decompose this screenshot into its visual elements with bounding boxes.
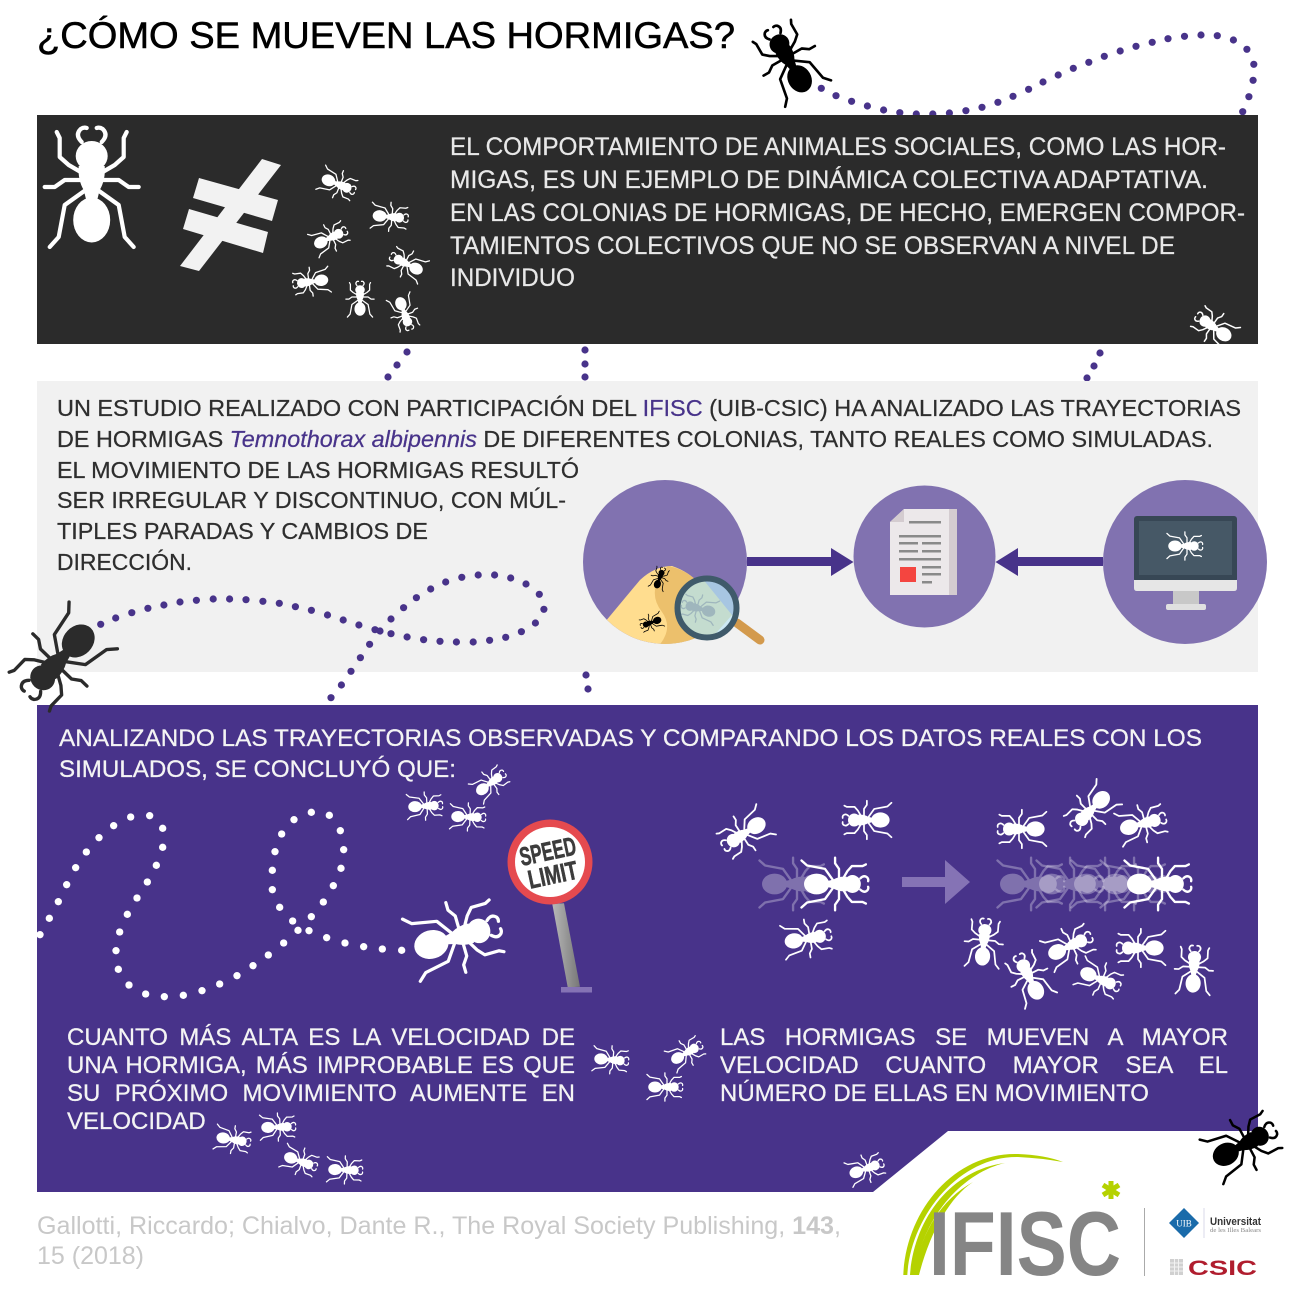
icon: ants with short displacement (712, 801, 891, 962)
icon: four small ants bottom (213, 1112, 363, 1185)
study text: TIPLES PARADAS Y CAMBIOS DE (57, 518, 428, 544)
arrow: to more ants (902, 860, 970, 904)
icon: many ants with long displacement (962, 777, 1214, 1010)
study text: EL MOVIMIENTO DE LAS HORMIGAS RESULTÓ (57, 457, 579, 483)
icon: ant peeking at panel edge (1190, 305, 1242, 344)
conclusions heading: SIMULADOS, SE CONCLUYÓ QUE: (59, 756, 456, 783)
logo: CSIC (1170, 1257, 1257, 1280)
icon: speed limit sign: SPEED (517, 831, 579, 872)
logo: IFISC: IFISC (929, 1194, 1121, 1295)
intro text: EN LAS COLONIAS DE HORMIGAS, DE HECHO, EMERGEN COMPOR- (450, 200, 1245, 227)
text block: left conclusion (67, 1024, 575, 1135)
intro text: TAMIENTOS COLECTIVOS QUE NO SE OBSERVAN A NIVEL DE (450, 233, 1175, 260)
arrow: to document (747, 548, 854, 576)
icon: three small ants between texts (592, 1032, 709, 1101)
conclusions heading (59, 725, 1202, 783)
icon: black ant top (745, 14, 834, 108)
dotted trail: top (818, 31, 1257, 118)
dotted trail: middle loop (97, 571, 592, 701)
title: ¿CÓMO SE MUEVEN LAS HORMIGAS? (37, 15, 735, 56)
icon: speed limit sign (508, 820, 592, 992)
text block: right conclusion (720, 1024, 1228, 1107)
text block: left conclusion: UNA HORMIGA, MÁS IMPROBABLE ES QUE (67, 1052, 575, 1079)
logo: IFISC (903, 1154, 1121, 1295)
panel: conclusions (36, 705, 1258, 1192)
panel: dark intro (37, 115, 1258, 354)
intro text (450, 134, 1245, 292)
intro text: MIGAS, ES UN EJEMPLO DE DINÁMICA COLECTIVA ADAPTATIVA. (450, 167, 1208, 194)
study text: DIRECCIÓN. (57, 549, 192, 575)
dotted trail: white (36, 809, 405, 1000)
intro text: EL COMPORTAMIENTO DE ANIMALES SOCIALES, COMO LAS HOR- (450, 134, 1226, 161)
study text: DE HORMIGAS Temnothorax albipennis DE DIFERENTES COLONIAS, TANTO REALES COMO SIMULADAS. (57, 426, 1213, 452)
text block: left conclusion: CUANTO MÁS ALTA ES LA VELOCIDAD DE (67, 1024, 575, 1051)
conclusions heading: ANALIZANDO LAS TRAYECTORIAS OBSERVADAS Y COMPARANDO LOS DATOS REALES CON LOS (59, 725, 1202, 752)
study text: UN ESTUDIO REALIZADO CON PARTICIPACIÓN DEL IFISC (UIB-CSIC) HA ANALIZADO LAS TRAYECTORIAS (57, 395, 1241, 421)
intro text: INDIVIDUO (450, 265, 575, 292)
logo: UIB (1169, 1208, 1262, 1238)
icon: computer monitor (1103, 480, 1267, 644)
text block: right conclusion: NÚMERO DE ELLAS EN MOVIMIENTO (720, 1080, 1149, 1107)
icon: speed limit sign: LIMIT (525, 855, 580, 895)
text block: left conclusion: VELOCIDAD (67, 1108, 206, 1135)
icon: small ant at panel corner (843, 1149, 888, 1189)
text block: right conclusion: VELOCIDAD CUANTO MAYOR SEA EL (720, 1052, 1228, 1079)
study text: SER IRREGULAR Y DISCONTINUO, CON MÚL- (57, 487, 566, 513)
dotted trail: between panels one and two (384, 346, 1104, 382)
study text (57, 395, 1241, 575)
icon: group of small ants (291, 164, 430, 335)
logo: UIB: UIB (1176, 1218, 1192, 1228)
icon: dark ant on left (0, 599, 120, 720)
citation: Gallotti, Riccardo; Chialvo, Dante R., The Royal Society Publishing, 143, (37, 1212, 841, 1240)
icon: fast ant (401, 890, 510, 985)
logo: CSIC: CSIC (1188, 1257, 1257, 1280)
citation (37, 1212, 841, 1270)
icon: three small ants near heading (406, 761, 513, 832)
arrow: from simulation (996, 548, 1103, 576)
icon: anthill with magnifier (583, 480, 760, 650)
panel: study (37, 381, 1267, 672)
icon: not equal sign (180, 159, 281, 271)
text block: right conclusion: LAS HORMIGAS SE MUEVEN A MAYOR (720, 1024, 1228, 1051)
text block: left conclusion: SU PRÓXIMO MOVIMIENTO AUMENTE EN (67, 1080, 575, 1107)
citation: 15 (2018) (37, 1242, 144, 1270)
icon: large white ant (45, 128, 139, 247)
icon: document (854, 486, 996, 628)
icon: black ant bottom right (1198, 1103, 1288, 1187)
logo: UIB: Universitat (1210, 1216, 1261, 1228)
divider (1144, 1208, 1146, 1276)
logo: UIB: de les Illes Balears (1210, 1228, 1262, 1234)
